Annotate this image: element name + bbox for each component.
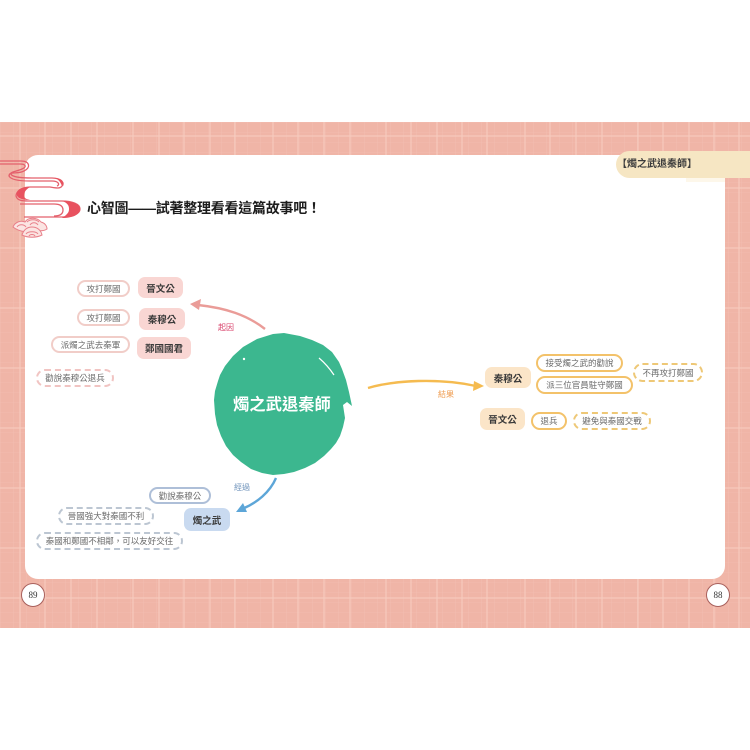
pill: station officers [536,376,633,394]
node: Zhu Zhi Wu [184,508,230,531]
pill: accept persuasion [536,354,623,372]
label: process: 經過 [234,483,250,492]
dashed pill: no more attack: 不再攻打鄭國 [642,368,694,378]
node: Qin Mu Gong result: 秦穆公 [494,374,522,384]
node: Zheng ruler: 鄭國國君 [145,344,183,355]
node: Qin Mu Gong result [485,367,531,388]
node: Qin Mu Gong [139,308,185,330]
chapter tab [616,151,750,178]
dashed pill: not neighbours [36,532,183,550]
node: Qin Mu Gong: 秦穆公 [148,315,176,326]
pill: attack Zheng 2 [77,309,130,326]
pill: accept persuasion: 接受燭之武的勸說 [545,358,614,368]
decoration: red cloud ornament [0,160,81,238]
dashed pill: persuade [36,369,114,387]
dashed pill: no more attack [633,363,703,382]
chapter tab: 【燭之武退秦師】 [617,159,697,170]
page number 89: 89 [28,590,38,600]
title: 心智圖——試著整理看看這篇故事吧！ [87,200,321,216]
pill: persuade Qin Mu Gong: 勸說秦穆公 [159,490,201,500]
dashed pill: Jin strong [58,507,154,525]
page number 89 [21,583,45,607]
tab underline strip [686,178,725,182]
label: cause: 起因 [218,323,234,332]
node: Jin Wen Gong [138,277,183,298]
pill: attack Zheng 2: 攻打鄭國 [86,312,120,322]
label: result: 結果 [438,390,454,399]
pill: retreat [531,412,567,430]
node: Jin Wen Gong: 晉文公 [146,284,175,294]
page number 88: 88 [714,590,722,600]
pill: send Zhu Zhi Wu: 派燭之武去秦軍 [61,340,120,350]
node: Zheng ruler [137,337,191,359]
central title: 燭之武退秦師 [233,396,331,414]
pill: retreat: 退兵 [540,416,558,426]
node: Jin Wen Gong result: 晉文公 [488,415,517,426]
pill: attack Zheng 1: 攻打鄭國 [86,284,120,294]
pill: send Zhu Zhi Wu [51,336,130,353]
pill: persuade Qin Mu Gong [149,487,211,504]
node: Zhu Zhi Wu: 燭之武 [193,516,221,526]
dashed pill: persuade: 勸說秦穆公退兵 [45,373,105,383]
page number 88 [706,583,730,607]
pill: attack Zheng 1 [77,280,130,297]
dashed pill: avoid war: 避免與秦國交戰 [582,416,642,426]
node: Jin Wen Gong result [480,408,525,430]
dashed pill: not neighbours: 秦國和鄭國不相鄰，可以友好交往 [46,536,173,546]
dashed pill: Jin strong: 晉國強大對秦國不利 [68,511,144,521]
pill: station officers: 派三位官員駐守鄭國 [546,380,623,390]
dashed pill: avoid war [573,412,651,430]
